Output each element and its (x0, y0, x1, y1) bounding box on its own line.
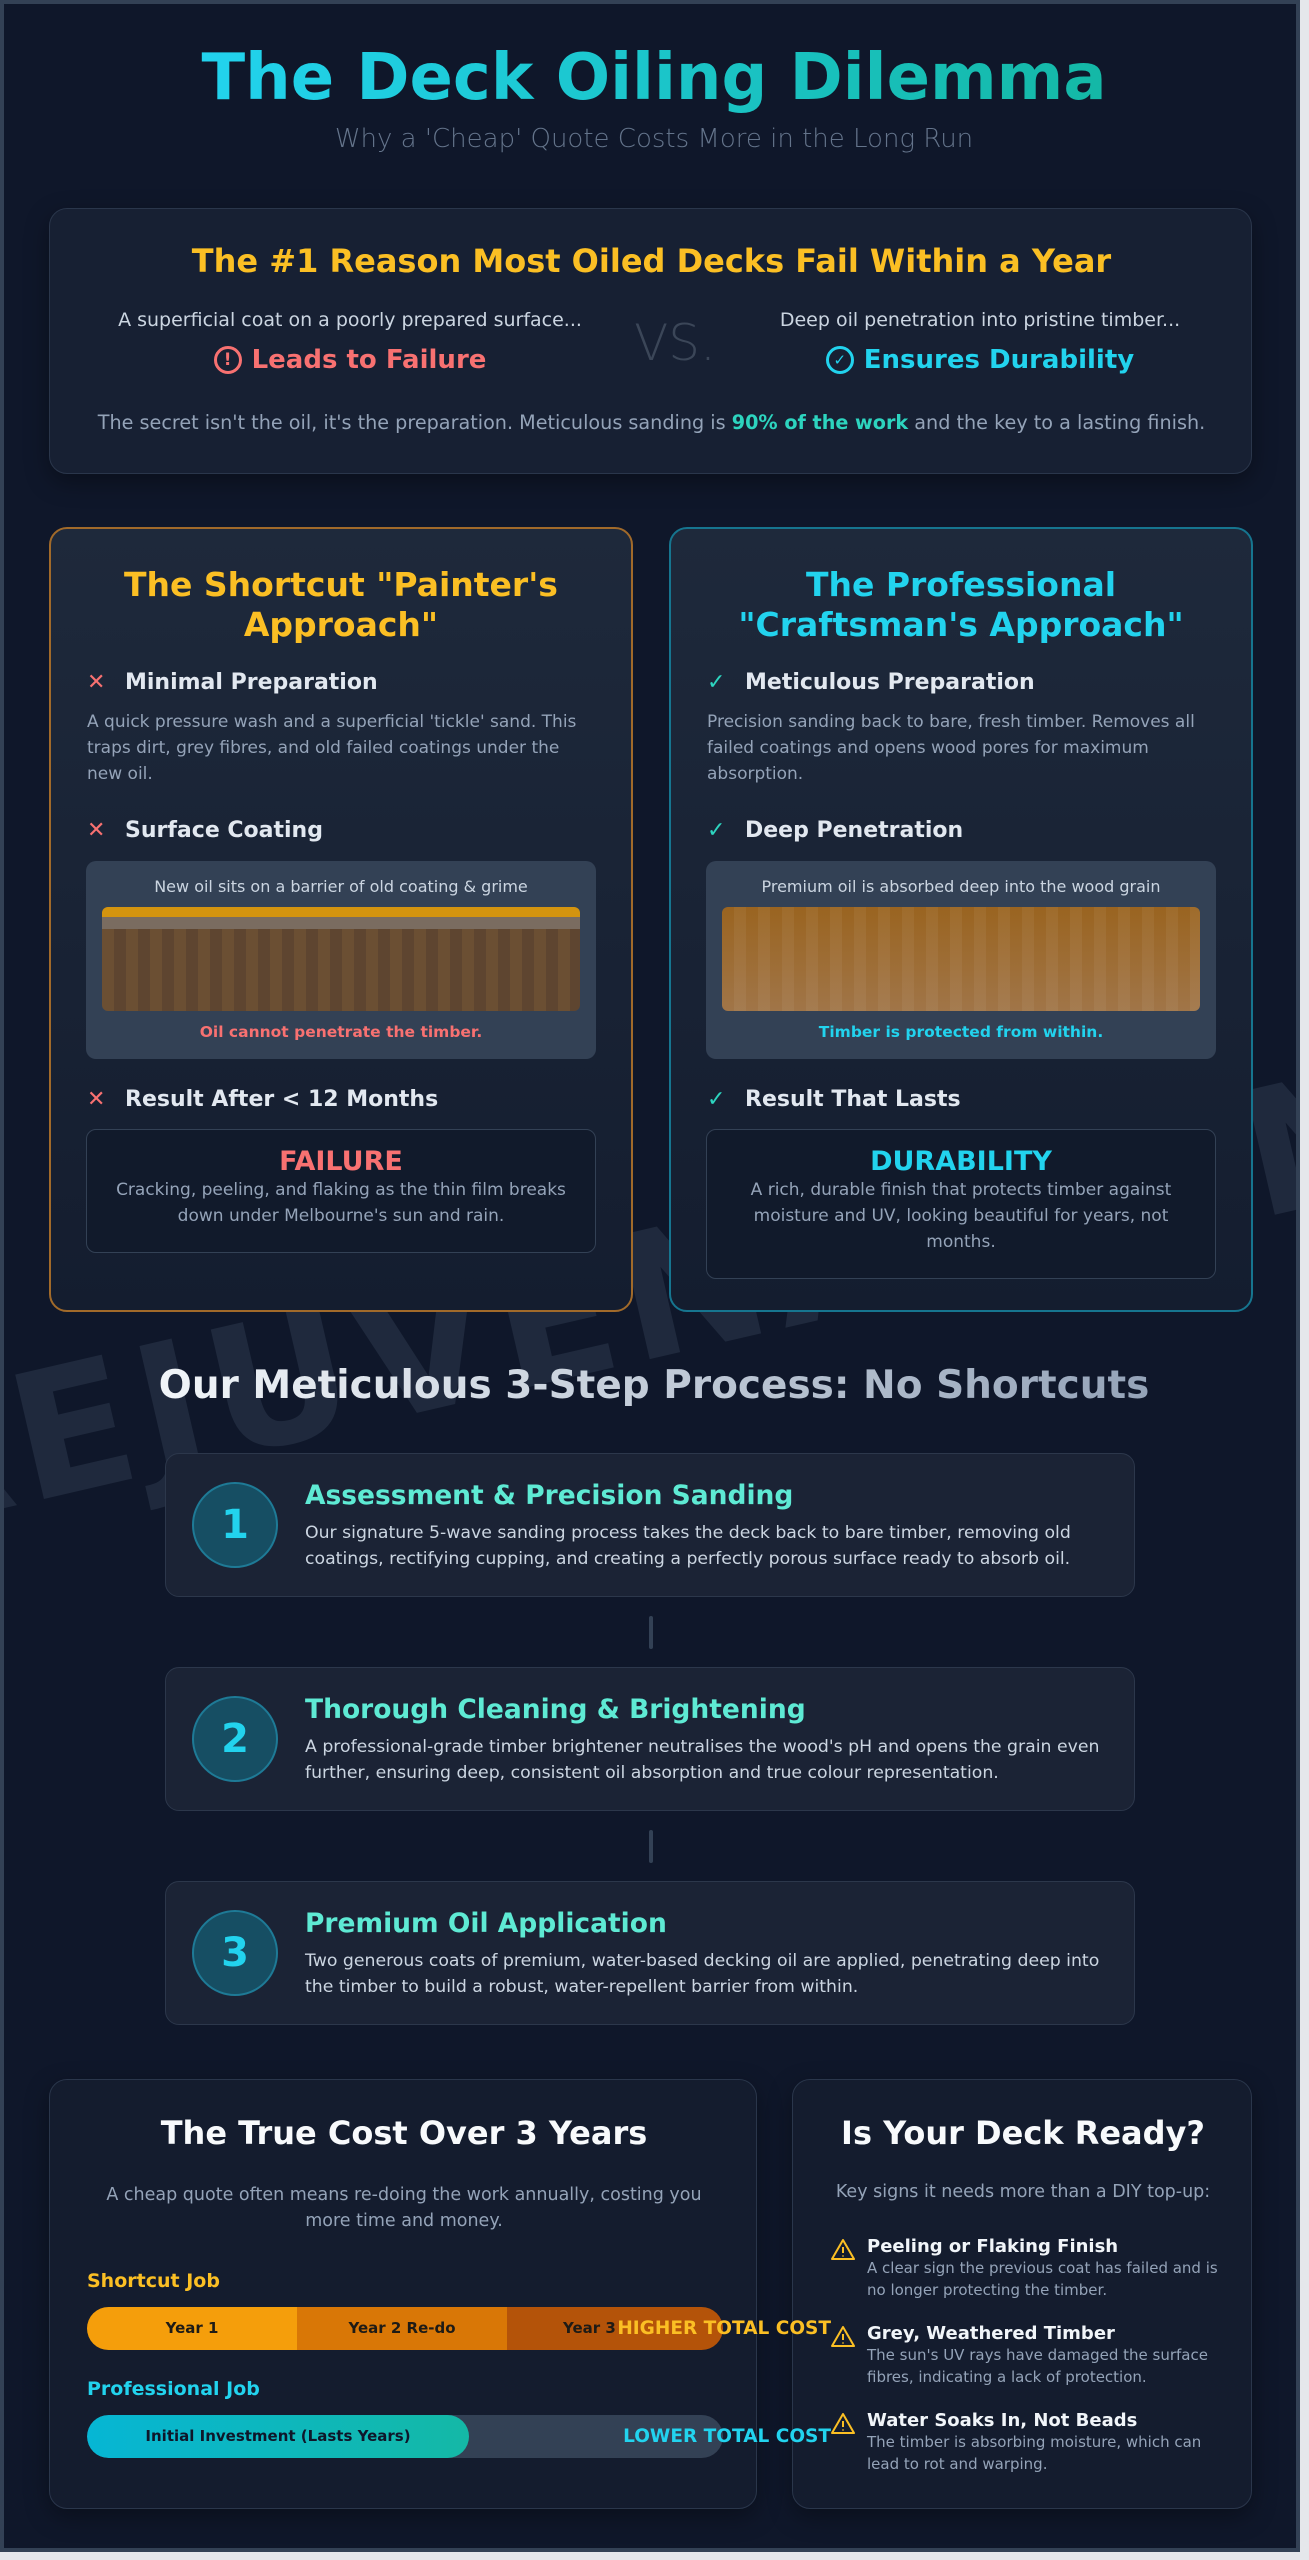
panel: professional approach (669, 527, 1253, 1312)
heading: Is Your Deck Ready? (841, 2114, 1205, 2152)
diagram: surface coating (86, 861, 596, 1059)
chart: shortcut bar (87, 2270, 831, 2350)
chart: shortcut bar: Year 2 Re-do (348, 2319, 456, 2337)
icon: number 3 (192, 1910, 278, 1996)
text: professional side: Ensures Durability (864, 345, 1134, 375)
item: meticulous preparation: ✓ (707, 670, 725, 695)
chart: professional bar: LOWER TOTAL COST (623, 2426, 831, 2447)
icon: number 3: 3 (221, 1930, 249, 1976)
sign: grey timber (831, 2323, 1208, 2386)
step 3: Two generous coats of premium, water-based decking oil are applied, penetrating deep into the timber to build a robust, water-repellent barrier from within. (305, 1951, 1099, 1997)
result box: durability: A rich, durable finish that protects timber against moisture and UV, looking beautiful for years, not months. (751, 1180, 1171, 1252)
panel: true cost (49, 2079, 757, 2509)
chart: shortcut bar: Year 3 (563, 2319, 616, 2337)
heading: The Shortcut "Painter's (124, 565, 558, 604)
heading: The True Cost Over 3 Years (161, 2114, 647, 2152)
text: secret: The secret isn't the oil, it's the preparation. Meticulous sanding is 90% of the work and the key to a lasting finish. (98, 411, 1205, 434)
chart: shortcut bar: Shortcut Job (87, 2270, 220, 2292)
subtitle: Why a 'Cheap' Quote Costs More in the Long Run (335, 124, 973, 154)
step 3: Premium Oil Application (305, 1908, 667, 1939)
item: meticulous preparation: Meticulous Preparation (745, 670, 1035, 695)
arrow: connector 1 (649, 1616, 653, 1649)
sign: water soaks: The timber is absorbing moisture, which can lead to rot and warping. (867, 2433, 1201, 2473)
result box: durability: DURABILITY (870, 1146, 1052, 1177)
diagram: deep penetration: Timber is protected from within. (819, 1023, 1103, 1041)
heading: reason: The #1 Reason Most Oiled Decks Fail Within a Year (192, 242, 1111, 280)
result box: failure: FAILURE (279, 1146, 403, 1177)
result box: durability (706, 1129, 1216, 1279)
chart: shortcut bar: HIGHER TOTAL COST (617, 2318, 831, 2339)
item: surface coating: Surface Coating (125, 818, 323, 843)
step 2 (165, 1667, 1135, 1811)
result box: failure: Cracking, peeling, and flaking as the thin film breaks down under Melbourne's sun and rain. (116, 1180, 566, 1226)
icon: number 1 (192, 1482, 278, 1568)
result box: failure (86, 1129, 596, 1253)
diagram: deep penetration: Premium oil is absorbed deep into the wood grain (761, 877, 1160, 896)
step 1 (165, 1453, 1135, 1597)
sign: water soaks (831, 2410, 1201, 2473)
sign: peeling: Peeling or Flaking Finish (867, 2236, 1118, 2257)
heading (738, 565, 1184, 644)
sign: grey timber: Grey, Weathered Timber (867, 2323, 1115, 2344)
heading: The Professional (806, 565, 1116, 604)
heading: process: Our Meticulous 3-Step Process: No Shortcuts (159, 1363, 1149, 1408)
chart: shortcut bar: Year 1 (166, 2319, 218, 2337)
sign: grey timber: The sun's UV rays have damaged the surface fibres, indicating a lack of protection. (867, 2346, 1208, 2386)
icon: number 1: 1 (221, 1502, 249, 1548)
icon: number 2: 2 (221, 1716, 249, 1762)
item: minimal preparation: ✕ (87, 670, 105, 695)
item: deep penetration: Deep Penetration (745, 818, 963, 843)
item: deep penetration: ✓ (707, 818, 725, 843)
panel: professional approach: Precision sanding back to bare, fresh timber. Removes all failed coatings and opens wood pores for maximum absorption. (707, 712, 1195, 784)
chart: professional bar: Professional Job (87, 2378, 260, 2400)
step 1: Assessment & Precision Sanding (305, 1480, 793, 1511)
step 2: Thorough Cleaning & Brightening (305, 1694, 806, 1725)
heading: Approach" (244, 605, 438, 644)
icon: number 2 (192, 1696, 278, 1782)
step 1: Our signature 5-wave sanding process takes the deck back to bare timber, removing old coatings, rectifying cupping, and creating a perfectly porous surface ready to absorb oil. (305, 1523, 1071, 1569)
item: surface coating: ✕ (87, 818, 105, 843)
text: Key signs it needs more than a DIY top-up: (836, 2182, 1210, 2202)
text: shortcut side: A superficial coat on a poorly prepared surface... (118, 309, 582, 331)
text: professional side: ✓ (833, 351, 846, 369)
text: professional side: Deep oil penetration into pristine timber... (780, 309, 1180, 331)
panel: main reason (49, 208, 1252, 474)
panel: shortcut approach: A quick pressure wash and a superficial 'tickle' sand. This traps dirt, grey fibres, and old failed coatings under the new oil. (87, 712, 576, 784)
chart: professional bar (87, 2378, 831, 2458)
heading: "Craftsman's Approach" (738, 605, 1184, 644)
item: result: ✕ (87, 1087, 105, 1112)
item: result lasts: ✓ (707, 1087, 725, 1112)
diagram: surface coating: Oil cannot penetrate the timber. (200, 1023, 482, 1041)
arrow: connector 2 (649, 1830, 653, 1863)
text: shortcut side: Leads to Failure (252, 345, 486, 375)
heading (124, 565, 558, 644)
text: professional side (780, 309, 1180, 375)
chart: professional bar: Initial Investment (Lasts Years) (145, 2427, 411, 2445)
item: result lasts: Result That Lasts (745, 1087, 961, 1112)
text: shortcut side (118, 309, 582, 375)
title: The Deck Oiling Dilemma (201, 41, 1107, 115)
item: minimal preparation: Minimal Preparation (125, 670, 378, 695)
diagram: deep penetration (706, 861, 1216, 1059)
sign: peeling: A clear sign the previous coat has failed and is no longer protecting the timber. (867, 2259, 1218, 2299)
vs: VS. (634, 314, 716, 372)
item: result: Result After < 12 Months (125, 1087, 438, 1112)
step 3 (165, 1881, 1135, 2025)
text: A cheap quote often means re-doing the work annually, costing you more time and money. (106, 2185, 702, 2231)
text: shortcut side: ! (224, 350, 231, 370)
panel: shortcut approach (49, 527, 633, 1312)
sign: peeling (831, 2236, 1218, 2299)
panel: is your deck ready (792, 2079, 1252, 2509)
step 2: A professional-grade timber brightener neutralises the wood's pH and opens the grain even further, ensuring deep, consistent oil absorption and true colour representation. (305, 1737, 1099, 1783)
sign: water soaks: Water Soaks In, Not Beads (867, 2410, 1137, 2431)
diagram: surface coating: New oil sits on a barrier of old coating & grime (154, 877, 528, 896)
